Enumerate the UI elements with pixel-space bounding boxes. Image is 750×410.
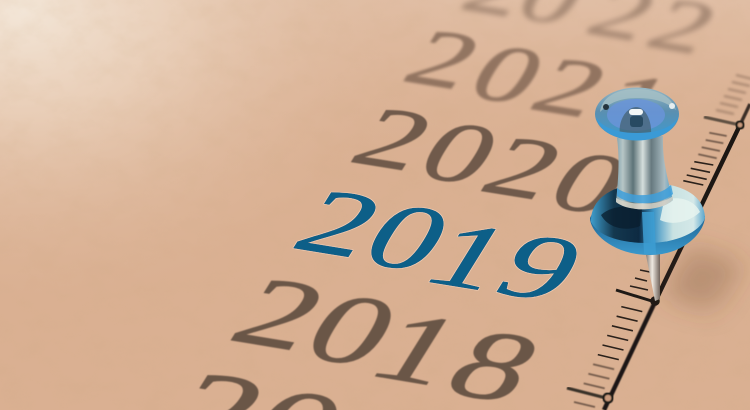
ruler main line	[655, 125, 740, 302]
year 2020: 0	[401, 103, 519, 203]
year 2021 (blurred): 0	[453, 27, 564, 121]
year 2019 (highlighted): 2	[276, 170, 403, 277]
pin stem	[616, 136, 673, 209]
year 2019 (highlighted): 9	[477, 214, 604, 321]
year 2021 (blurred): 2	[389, 12, 500, 106]
year 2020	[335, 89, 649, 233]
year 2022 (blurred)	[448, 0, 734, 69]
year 2018: 1	[350, 291, 487, 406]
year 2020: 0	[531, 133, 649, 233]
year 2020: 2	[335, 89, 453, 189]
ruler major ticks	[567, 117, 740, 398]
ruler sharp minor ticks	[598, 162, 713, 360]
year 2017 fragment (cropped)	[144, 349, 368, 410]
year 2021 (blurred): 2	[516, 40, 627, 134]
year 2020: 2	[465, 118, 583, 218]
year 2019 (highlighted): 0	[344, 184, 471, 291]
year 2021 (blurred): 1	[580, 56, 691, 150]
ruler: timeline scale	[567, 75, 750, 410]
pin cast shadow	[662, 245, 745, 312]
ruler nodes	[604, 121, 744, 403]
pin base	[590, 183, 705, 255]
pin head	[595, 88, 679, 140]
year 2018: 0	[284, 272, 421, 387]
year 2021 (blurred)	[389, 12, 691, 150]
year 2019 (highlighted)	[276, 170, 604, 321]
year 2019 (highlighted): 1	[406, 203, 533, 310]
year 2018: 2	[212, 256, 349, 371]
pin needle	[646, 253, 660, 301]
ruler blurred far ticks	[716, 75, 750, 114]
ruler soft minor ticks	[574, 133, 727, 407]
year 2018	[212, 256, 563, 410]
icon: blue push pin	[590, 88, 705, 301]
